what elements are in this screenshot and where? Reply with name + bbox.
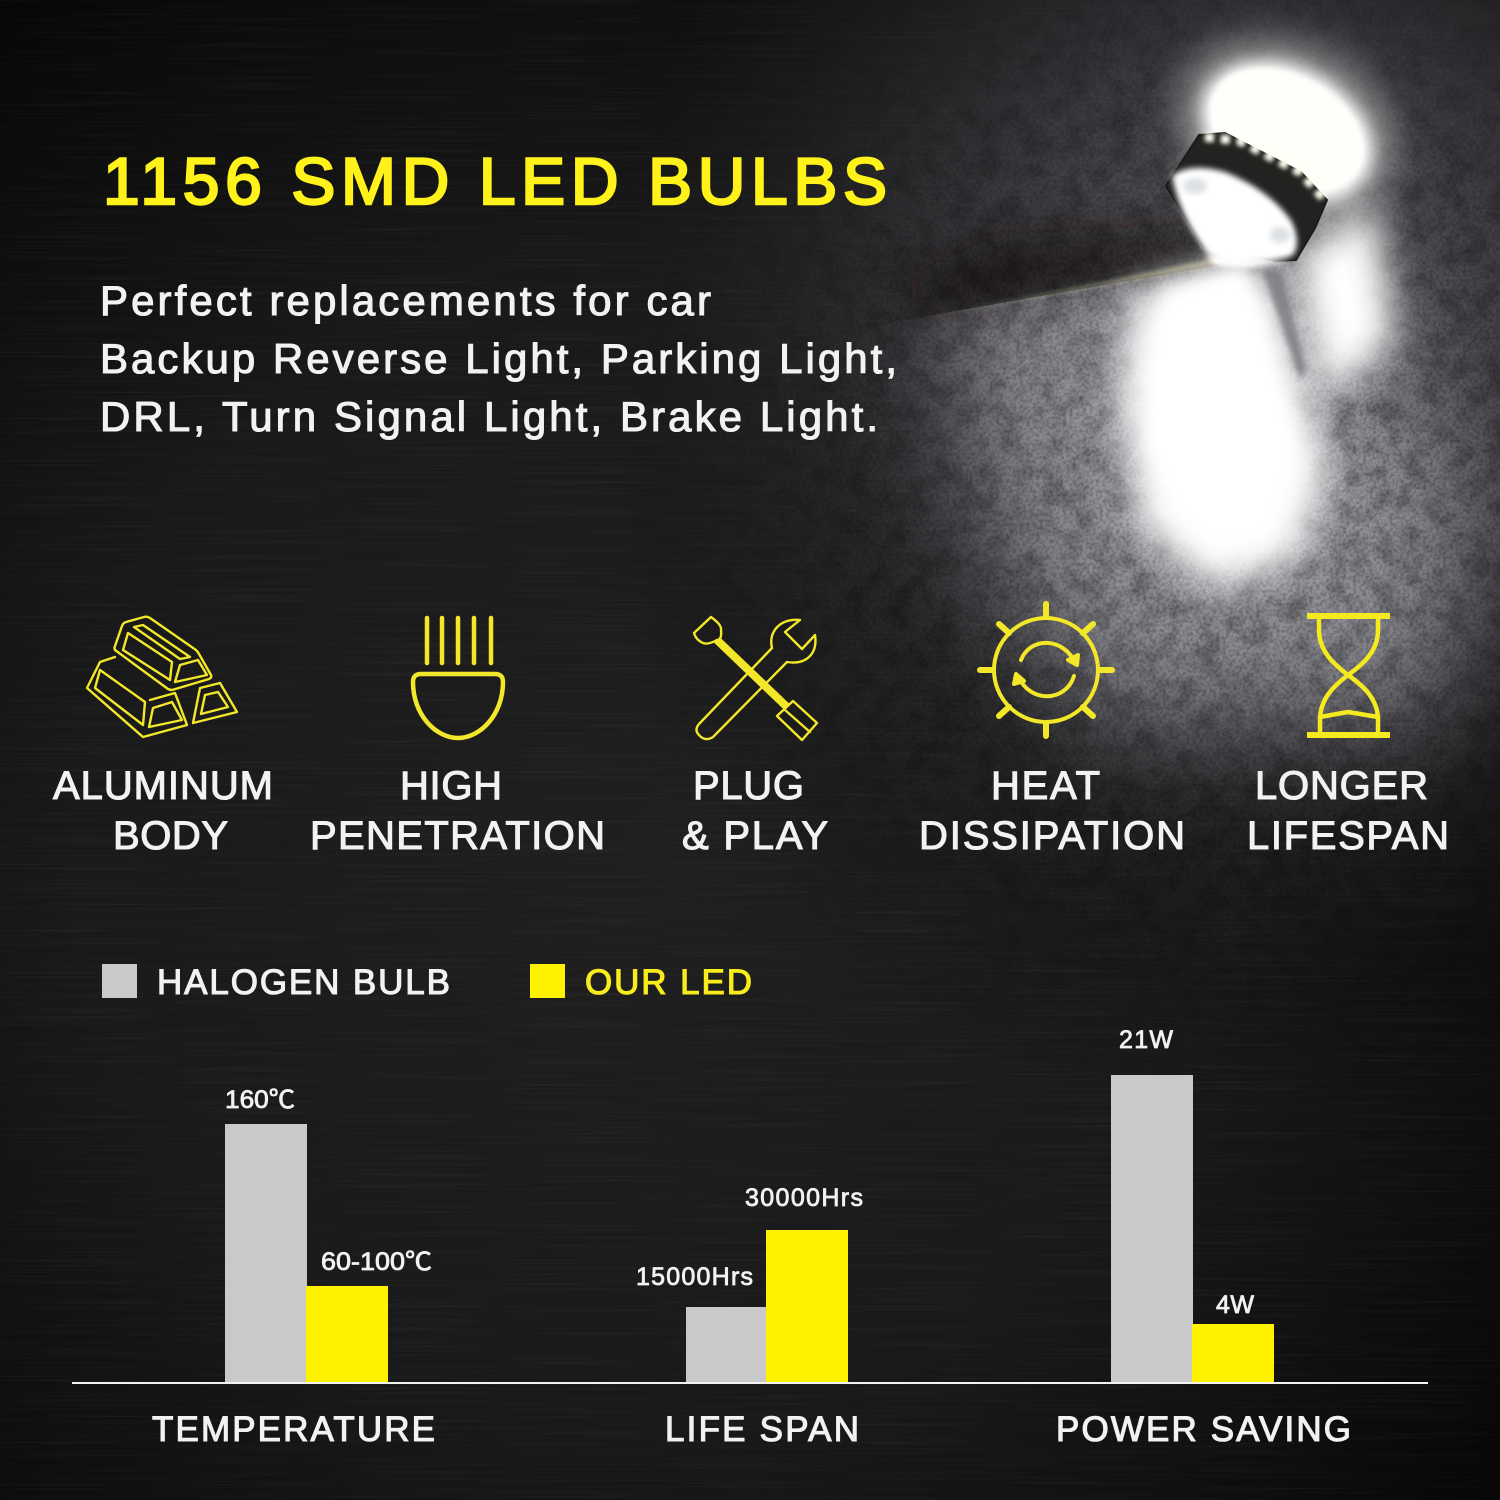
chart group: temperature: TEMPERATURE bbox=[152, 1410, 435, 1449]
label: BODY bbox=[113, 814, 228, 858]
title: 1156 SMD LED BULBS bbox=[103, 144, 887, 218]
label bbox=[1247, 764, 1449, 858]
legend bbox=[102, 963, 752, 1002]
label bbox=[919, 764, 1185, 858]
legend: our LED: OUR LED bbox=[585, 963, 752, 1002]
label: DISSIPATION bbox=[919, 814, 1185, 858]
chart group: life span: 15000Hrs bbox=[636, 1263, 753, 1291]
chart group: life span: LIFE SPAN bbox=[665, 1410, 859, 1449]
label: PENETRATION bbox=[310, 814, 605, 858]
bulb glow bbox=[1149, 5, 1425, 255]
feature: aluminum body bbox=[53, 617, 273, 858]
feature: heat dissipation bbox=[919, 604, 1185, 858]
chart group: temperature: 160℃ bbox=[225, 1086, 295, 1114]
intro paragraph bbox=[100, 277, 897, 440]
bar chart: comparison bbox=[72, 1026, 1428, 1449]
label: HIGH bbox=[400, 764, 502, 808]
intro paragraph: Perfect replacements for car bbox=[100, 277, 711, 324]
chart group: power saving: POWER SAVING bbox=[1056, 1410, 1351, 1449]
label bbox=[310, 764, 605, 858]
icon: crossed tools bbox=[694, 617, 817, 740]
feature: plug and play bbox=[682, 617, 828, 858]
chart group: power saving bbox=[1056, 1026, 1351, 1449]
label: HEAT bbox=[991, 764, 1100, 808]
LED scallops along the band bbox=[1205, 137, 1325, 200]
bulb body bbox=[1166, 133, 1327, 261]
label: & PLAY bbox=[682, 814, 828, 858]
chart group: life span bbox=[636, 1184, 863, 1449]
chart group: life span: 30000Hrs bbox=[745, 1184, 863, 1212]
intro paragraph: Backup Reverse Light, Parking Light, bbox=[100, 335, 897, 382]
chart group: power saving: 21W bbox=[1119, 1026, 1173, 1054]
label: LIFESPAN bbox=[1247, 814, 1449, 858]
legend: halogen bulb: HALOGEN BULB bbox=[157, 963, 450, 1002]
icon: aluminum bars bbox=[87, 617, 237, 737]
chart group: temperature: 60-100℃ bbox=[321, 1248, 432, 1276]
chart group: power saving: 4W bbox=[1216, 1291, 1254, 1319]
label bbox=[682, 764, 828, 858]
bulb lens bbox=[1172, 168, 1297, 263]
label: ALUMINUM bbox=[53, 764, 273, 808]
photo: glowing LED bulb and light beam bbox=[744, 0, 1500, 862]
icon: hourglass bbox=[1307, 616, 1390, 735]
label bbox=[53, 764, 273, 858]
feature: high penetration bbox=[310, 618, 605, 858]
icon: sun with cycle arrows bbox=[980, 604, 1112, 736]
icon: headlight beams bbox=[413, 618, 503, 738]
chart group: temperature bbox=[152, 1086, 435, 1449]
label: PLUG bbox=[693, 764, 804, 808]
label: LONGER bbox=[1255, 764, 1428, 808]
feature: longer lifespan bbox=[1247, 616, 1449, 858]
intro paragraph: DRL, Turn Signal Light, Brake Light. bbox=[100, 393, 878, 440]
